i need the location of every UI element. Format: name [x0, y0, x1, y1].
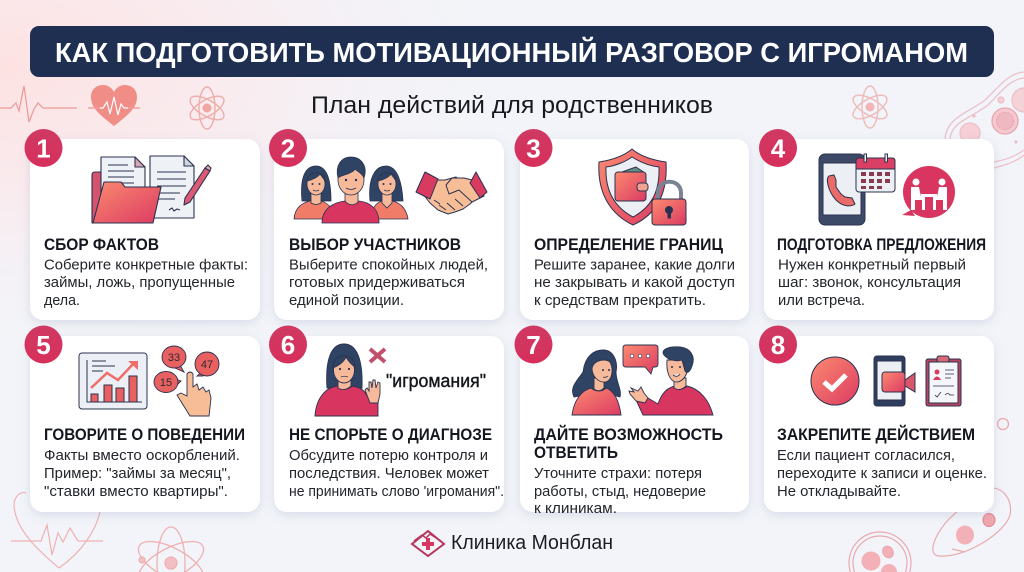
number badge 1	[24, 129, 62, 167]
title bar	[30, 26, 994, 77]
heading: СБОР ФАКТОВ	[44, 236, 159, 254]
heading: ВЫБОР УЧАСТНИКОВ	[289, 236, 461, 254]
number badge 7: 7	[526, 330, 541, 360]
description	[778, 258, 966, 309]
description: к клиникам.	[534, 501, 617, 517]
number badge 5: 5	[36, 330, 51, 360]
description: шаг: звонок, консультация	[778, 275, 961, 291]
description: Если пациент согласился,	[777, 448, 955, 464]
description: работы, стыд, недоверие	[534, 484, 706, 500]
description: займы, ложь, пропущенные	[44, 275, 235, 291]
decoration: heart outline bottom left	[11, 493, 103, 568]
card 7	[514, 326, 749, 517]
icon: phone and calendar	[819, 154, 895, 225]
icon: check mark	[811, 357, 859, 405]
icon: growth chart	[79, 353, 147, 409]
description: не принимать слово 'игромания".	[289, 484, 504, 500]
description: Решите заранее, какие долги	[534, 258, 735, 274]
description: Уточните страхи: потеря	[534, 466, 702, 482]
icon: numbers and pointing hand	[154, 346, 219, 416]
title bar: КАК ПОДГОТОВИТЬ МОТИВАЦИОННЫЙ РАЗГОВОР С ИГРОМАНОМ	[55, 36, 968, 68]
description: Обсудите потерю контроля и	[289, 448, 488, 464]
icon: numbers and pointing hand: 47	[201, 359, 213, 371]
forbidden word label: "игромания"	[386, 371, 486, 391]
description: переходите к записи и оценке.	[777, 466, 987, 482]
card 1	[24, 129, 260, 320]
description	[44, 258, 248, 309]
description: готовых придерживаться	[289, 275, 465, 291]
description: Нужен конкретный первый	[778, 258, 966, 274]
icon: folder, documents, pen	[92, 156, 211, 223]
heading: ГОВОРИТЕ О ПОВЕДЕНИИ	[44, 426, 245, 444]
number badge 5	[24, 326, 62, 364]
icon: woman	[572, 350, 621, 415]
decoration: cell top right	[945, 72, 1024, 168]
description: последствия. Человек может	[289, 466, 489, 482]
heading: ДАЙТЕ ВОЗМОЖНОСТЬ	[534, 425, 723, 444]
number badge 2	[269, 129, 307, 167]
number badge 6	[269, 326, 307, 364]
description: "ставки вместо квартиры".	[44, 484, 228, 500]
description: единой позиции.	[289, 293, 404, 309]
footer logo	[412, 531, 444, 556]
heading: ОПРЕДЕЛЕНИЕ ГРАНИЦ	[534, 236, 723, 254]
number badge 4	[759, 129, 797, 167]
clinic name: Клиника Монблан	[451, 532, 613, 554]
icon: speech bubble	[623, 345, 658, 374]
number badge 8	[759, 326, 797, 364]
number badge 6: 6	[281, 330, 295, 360]
icon: video call tablet	[874, 356, 915, 406]
number badge 2: 2	[281, 134, 295, 164]
description: дела.	[44, 293, 80, 309]
heading: ЗАКРЕПИТЕ ДЕЙСТВИЕМ	[777, 425, 975, 444]
card 5	[24, 326, 260, 512]
description	[777, 448, 987, 500]
description	[289, 258, 488, 309]
description: Выберите спокойных людей,	[289, 258, 488, 274]
card 3	[514, 129, 749, 320]
subtitle: План действий для родственников	[311, 92, 713, 119]
decoration: atom bottom	[132, 527, 210, 572]
description: к средствам прекратить.	[534, 293, 706, 309]
icon: shield, wallet, lock	[599, 149, 686, 225]
card 2	[269, 129, 504, 320]
description: Соберите конкретные факты:	[44, 258, 248, 274]
heading: ПОДГОТОВКА ПРЕДЛОЖЕНИЯ	[777, 236, 986, 254]
card 8	[759, 326, 994, 512]
description	[534, 466, 706, 517]
number badge 8: 8	[771, 330, 785, 360]
heading	[534, 425, 723, 462]
description	[534, 258, 735, 309]
description: Пример: "займы за месяц",	[44, 466, 231, 482]
description: Факты вместо оскорблений.	[44, 448, 240, 464]
decoration: ECG line and heart	[0, 85, 140, 126]
number badge 7	[514, 326, 552, 364]
description	[289, 448, 504, 500]
number badge 4: 4	[771, 134, 786, 164]
decoration: atom right	[850, 86, 890, 128]
heading: ОТВЕТИТЬ	[534, 444, 618, 462]
description: или встреча.	[778, 293, 865, 309]
decoration: atom left	[187, 87, 227, 129]
heading: НЕ СПОРЬТЕ О ДИАГНОЗЕ	[289, 426, 492, 444]
description: Не откладывайте.	[777, 484, 901, 500]
icon: three people	[294, 157, 408, 223]
number badge 3: 3	[526, 134, 541, 164]
icon: cross mark	[370, 349, 385, 362]
description	[44, 448, 240, 500]
icon: handshake	[416, 172, 487, 214]
icon: man gesturing	[629, 347, 713, 415]
number badge 1: 1	[36, 134, 51, 164]
number badge 3	[514, 129, 552, 167]
icon: meeting bubble	[902, 166, 955, 218]
description: не закрывать и какой доступ	[534, 275, 735, 291]
icon: numbers and pointing hand: 15	[160, 377, 172, 389]
icon: clipboard	[926, 356, 961, 406]
decoration: cells bottom right	[849, 418, 1011, 572]
icon: numbers and pointing hand: 33	[168, 352, 180, 364]
card 6	[269, 326, 504, 512]
icon: woman with raised hand	[315, 344, 380, 416]
card 4	[759, 129, 994, 320]
